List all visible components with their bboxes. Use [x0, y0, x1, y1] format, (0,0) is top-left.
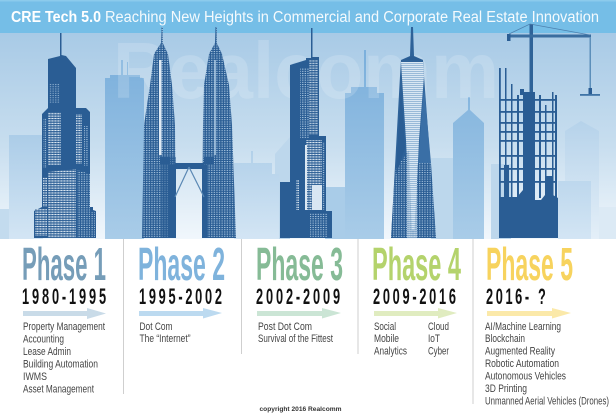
- text: Phase 1: [22, 238, 106, 290]
- phase 1 arrow: [23, 308, 106, 319]
- phase 4 list: Social: [374, 321, 396, 333]
- phase 1 list: IWMS: [23, 371, 47, 383]
- header title: CRE Tech 5.0: [11, 9, 101, 26]
- phase 4 list: Cyber: [428, 346, 449, 358]
- phase 5 list: Augmented Reality: [485, 346, 555, 358]
- phase 1 list: Property Management: [23, 321, 105, 333]
- phase 3 heading: Phase 3: [256, 238, 343, 290]
- phase 5 list: Blockchain: [485, 333, 525, 345]
- phase 5 arrow: [487, 308, 571, 318]
- phase 1 list: Accounting: [23, 334, 64, 346]
- scaffold frame: [499, 68, 557, 198]
- phase 2 list: The “Internet”: [140, 333, 191, 345]
- phase 1 list: [23, 321, 105, 396]
- panel: phase 3: [256, 238, 343, 345]
- phase 4 list: Mobile: [374, 333, 399, 345]
- phase 2 list: Dot Com: [140, 321, 172, 333]
- phase 2 list: [140, 321, 191, 345]
- panel: phase 5: [485, 238, 609, 408]
- phase 5 list: Robotic Automation: [485, 358, 559, 370]
- phase 3 list: Post Dot Com: [258, 321, 312, 333]
- phase 5 list: 3D Printing: [485, 383, 527, 395]
- core and base: [499, 89, 558, 238]
- tower 3: stepped tower: [280, 28, 332, 238]
- panel: phase 1: [22, 238, 106, 396]
- phase 1 list: Building Automation: [23, 358, 98, 370]
- phase 5 list: Autonomous Vehicles: [485, 370, 566, 382]
- phase 4 list: [374, 321, 449, 358]
- tower 1: Sears/Willis: [34, 33, 96, 238]
- divider lines: [124, 239, 473, 404]
- phase 1 list: Lease Admin: [23, 346, 71, 358]
- header banner: [0, 0, 616, 33]
- phase 5 list: [485, 321, 609, 408]
- phase 3 arrow: [257, 308, 341, 318]
- tower 4: One World Trade: [391, 27, 436, 238]
- phase 4 list: Cloud: [428, 321, 449, 333]
- tower 5: building under construction with crane: [499, 24, 600, 238]
- phase 3 list: [258, 321, 333, 345]
- skyline background: [0, 33, 616, 239]
- phase 1 dates: 1980-1995: [22, 284, 106, 309]
- tower 2: Petronas twin towers: [142, 27, 236, 239]
- watermark: Realcomm: Realcomm: [113, 26, 499, 115]
- phase 3 list: Survival of the Fittest: [258, 333, 333, 345]
- header title: Reaching New Heights in Commercial and Corporate Real Estate Innovation: [105, 9, 599, 26]
- phase 2 dates: 1995-2002: [139, 284, 222, 309]
- phase 4 list: IoT: [428, 333, 440, 345]
- phase 5 dates: 2016- ?: [486, 284, 546, 309]
- phase 5 list: AI/Machine Learning: [485, 321, 561, 333]
- crane: [507, 24, 600, 96]
- copyright: copyright 2016 Realcomm: [260, 406, 342, 413]
- phase 4 arrow: [374, 308, 457, 318]
- panel: phase 4: [372, 238, 461, 358]
- phase 2 heading: Phase 2: [138, 238, 225, 290]
- phase 3 dates: 2002-2009: [256, 284, 340, 309]
- phase 4 heading: Phase 4: [372, 238, 461, 290]
- phase 1 list: Asset Management: [23, 384, 94, 396]
- phase 4 dates: 2009-2016: [373, 284, 456, 309]
- panel: phase 2: [138, 238, 225, 345]
- phase 2 arrow: [139, 308, 222, 318]
- phase 4 list: Analytics: [374, 346, 407, 358]
